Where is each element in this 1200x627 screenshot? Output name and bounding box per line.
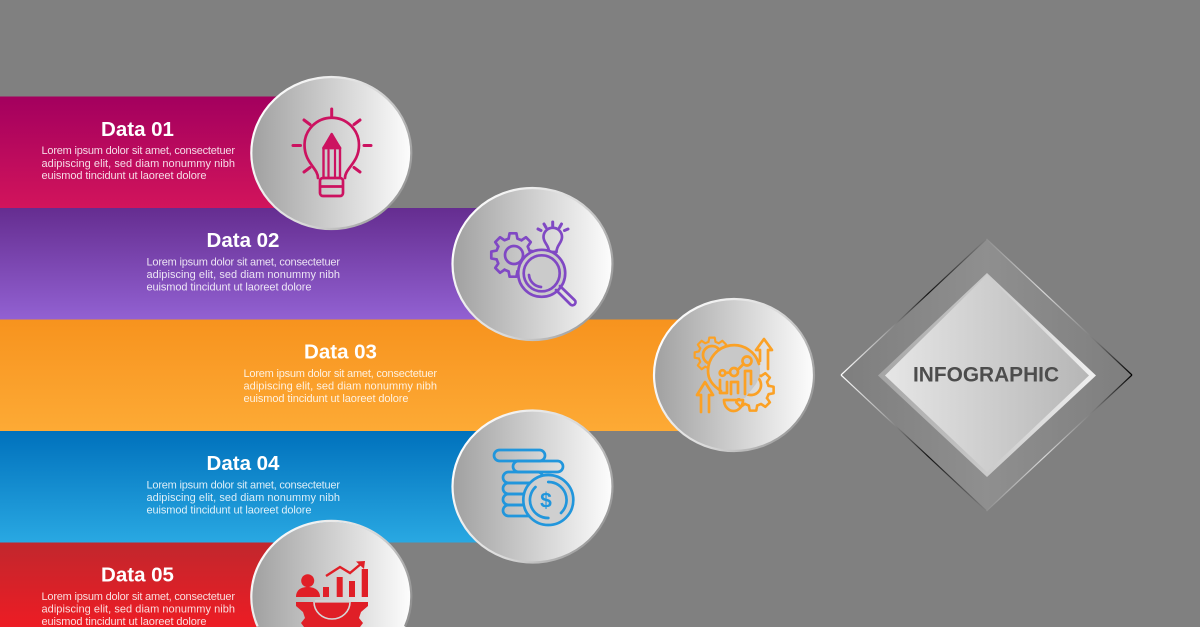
text block: Data 05: Lorem ipsum dolor sit amet, consectetuer (42, 591, 235, 603)
centre label: INFOGRAPHIC (913, 364, 1059, 386)
text block: Data 04: Lorem ipsum dolor sit amet, consectetuer (146, 480, 340, 492)
text block: Data 03: Data 03 (304, 340, 377, 364)
text block: Data 02: Lorem ipsum dolor sit amet, consectetuer (146, 256, 340, 268)
inner diamond bevel (878, 273, 1096, 477)
text block: Data 03: euismod tincidunt ut laoreet dolore (244, 393, 408, 405)
icon: person, growth chart and gear (296, 561, 368, 627)
circle: Data 02 (452, 188, 612, 340)
diamond emblem (841, 239, 1132, 511)
outer diamond (841, 239, 1132, 511)
icon: head with gears, chart and arrows (695, 338, 774, 412)
text block: Data 01: euismod tincidunt ut laoreet dolore (42, 170, 206, 182)
text block: Data 03: adipiscing elit, sed diam nonummy nibh (244, 380, 437, 392)
inner diamond face (885, 275, 1089, 472)
circle: Data 04 (452, 410, 612, 562)
text block: Data 05 (42, 564, 235, 627)
text block: Data 01: adipiscing elit, sed diam nonummy nibh (42, 158, 235, 170)
text block: Data 05: adipiscing elit, sed diam nonummy nibh (42, 604, 235, 616)
icon: coin stack with dollar (494, 450, 573, 525)
text block: Data 04: adipiscing elit, sed diam nonummy nibh (146, 492, 340, 504)
icon: coin stack with dollar: $ (540, 490, 552, 512)
text block: Data 02: adipiscing elit, sed diam nonummy nibh (146, 269, 340, 281)
circle: Data 03 (654, 299, 814, 451)
text block: Data 01: Lorem ipsum dolor sit amet, consectetuer (42, 145, 235, 157)
band: Data 05 (0, 542, 290, 627)
text block: Data 04 (146, 452, 340, 516)
band: Data 04 (0, 431, 490, 542)
icon: gear, magnifier and bulb (491, 222, 576, 305)
text block: Data 02 (146, 229, 340, 294)
band: Data 02 (0, 208, 490, 320)
text block: Data 05: Data 05 (101, 564, 174, 586)
text block: Data 03 (244, 340, 437, 405)
band: Data 01 (0, 96, 290, 208)
text block: Data 01 (42, 118, 235, 182)
text block: Data 04: Data 04 (207, 452, 280, 475)
circle: Data 01 (251, 77, 411, 229)
icon: lightbulb with pencil (293, 109, 371, 196)
text block: Data 04: euismod tincidunt ut laoreet dolore (146, 504, 312, 516)
text block: Data 03: Lorem ipsum dolor sit amet, consectetuer (244, 368, 437, 380)
circle: Data 05 (251, 521, 411, 627)
text block: Data 02: Data 02 (207, 229, 279, 252)
band: Data 03 (0, 320, 695, 431)
text block: Data 01: Data 01 (101, 118, 174, 141)
text block: Data 02: euismod tincidunt ut laoreet dolore (146, 282, 312, 294)
diamond edge highlights (841, 239, 1132, 511)
